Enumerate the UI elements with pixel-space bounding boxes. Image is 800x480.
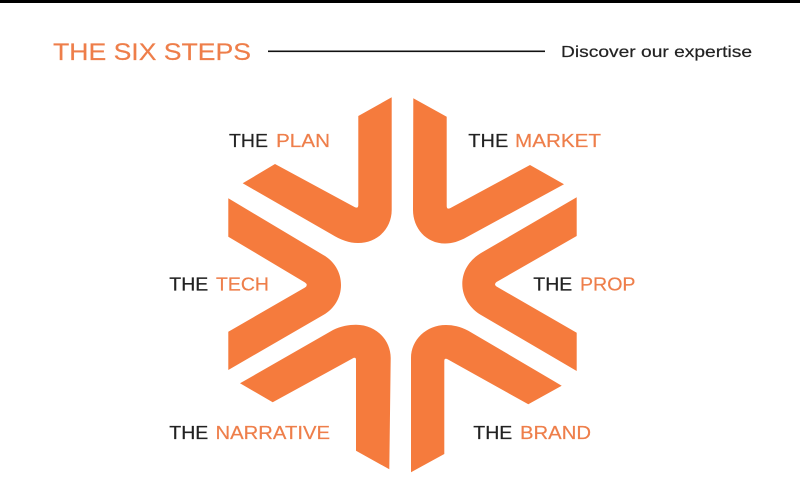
label: the narrative: THE (169, 422, 208, 443)
arm: the plan (243, 97, 392, 243)
label: the narrative (169, 422, 330, 443)
six-arm star diagram (228, 97, 577, 472)
label: the tech (169, 274, 269, 294)
label: the narrative: NARRATIVE (216, 422, 330, 443)
label: the brand: THE (473, 422, 512, 443)
label: the tech: THE (169, 274, 208, 294)
label: the prop: PROP (580, 274, 636, 294)
label: the plan: PLAN (276, 130, 330, 151)
subtitle: Discover our expertise (561, 44, 752, 61)
label: the tech: TECH (216, 274, 269, 294)
label: the brand: BRAND (520, 422, 591, 443)
label: the market (468, 130, 601, 151)
top black bar (0, 0, 800, 3)
label: the market: MARKET (515, 130, 601, 151)
arm: the prop (462, 197, 577, 371)
arm: the tech (228, 198, 341, 370)
header rule (268, 50, 545, 52)
label: the brand (473, 422, 591, 443)
arm: the brand (411, 325, 562, 472)
label: the market: THE (468, 130, 508, 151)
label: the prop: THE (533, 274, 572, 294)
arm: the market (413, 98, 564, 244)
arm: the narrative (240, 325, 391, 469)
label: the plan: THE (229, 130, 268, 151)
label: the prop (533, 274, 636, 294)
title: THE SIX STEPS (53, 39, 251, 66)
label: the plan (229, 130, 330, 151)
